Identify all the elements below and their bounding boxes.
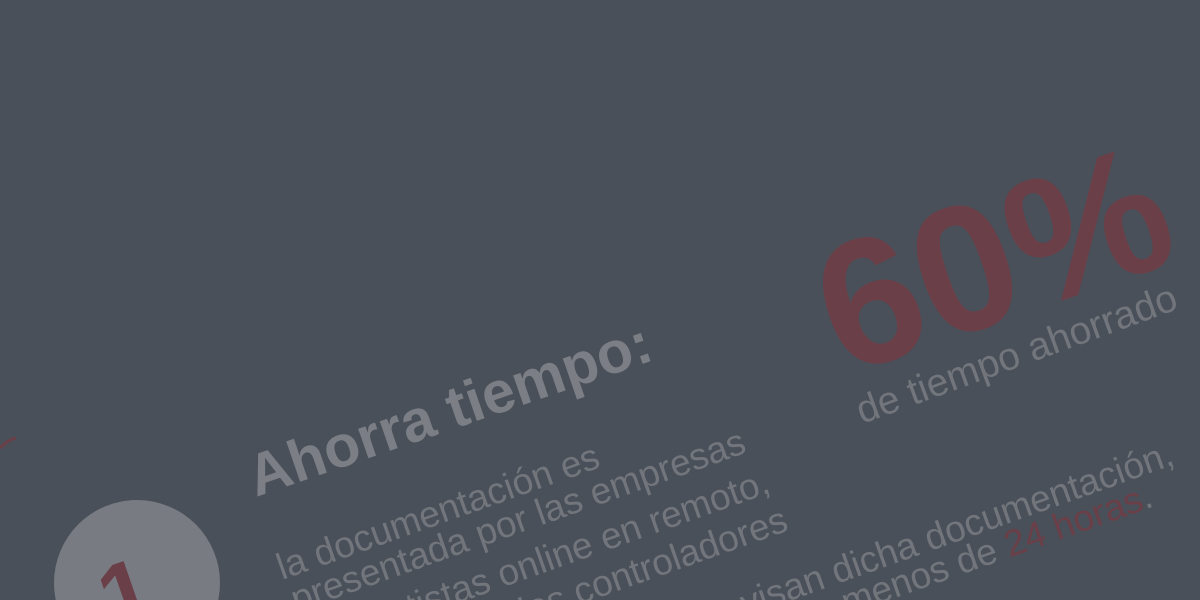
body paragraph: la documentación es xyxy=(271,436,605,588)
big stat: 60%: 60% xyxy=(790,106,1196,413)
number badge 1 xyxy=(54,500,220,600)
body paragraph xyxy=(271,421,1179,600)
stat caption: de tiempo ahorrado xyxy=(850,276,1183,432)
heading: Ahorra tiempo: xyxy=(239,309,660,509)
decorative red arc xyxy=(0,438,16,448)
